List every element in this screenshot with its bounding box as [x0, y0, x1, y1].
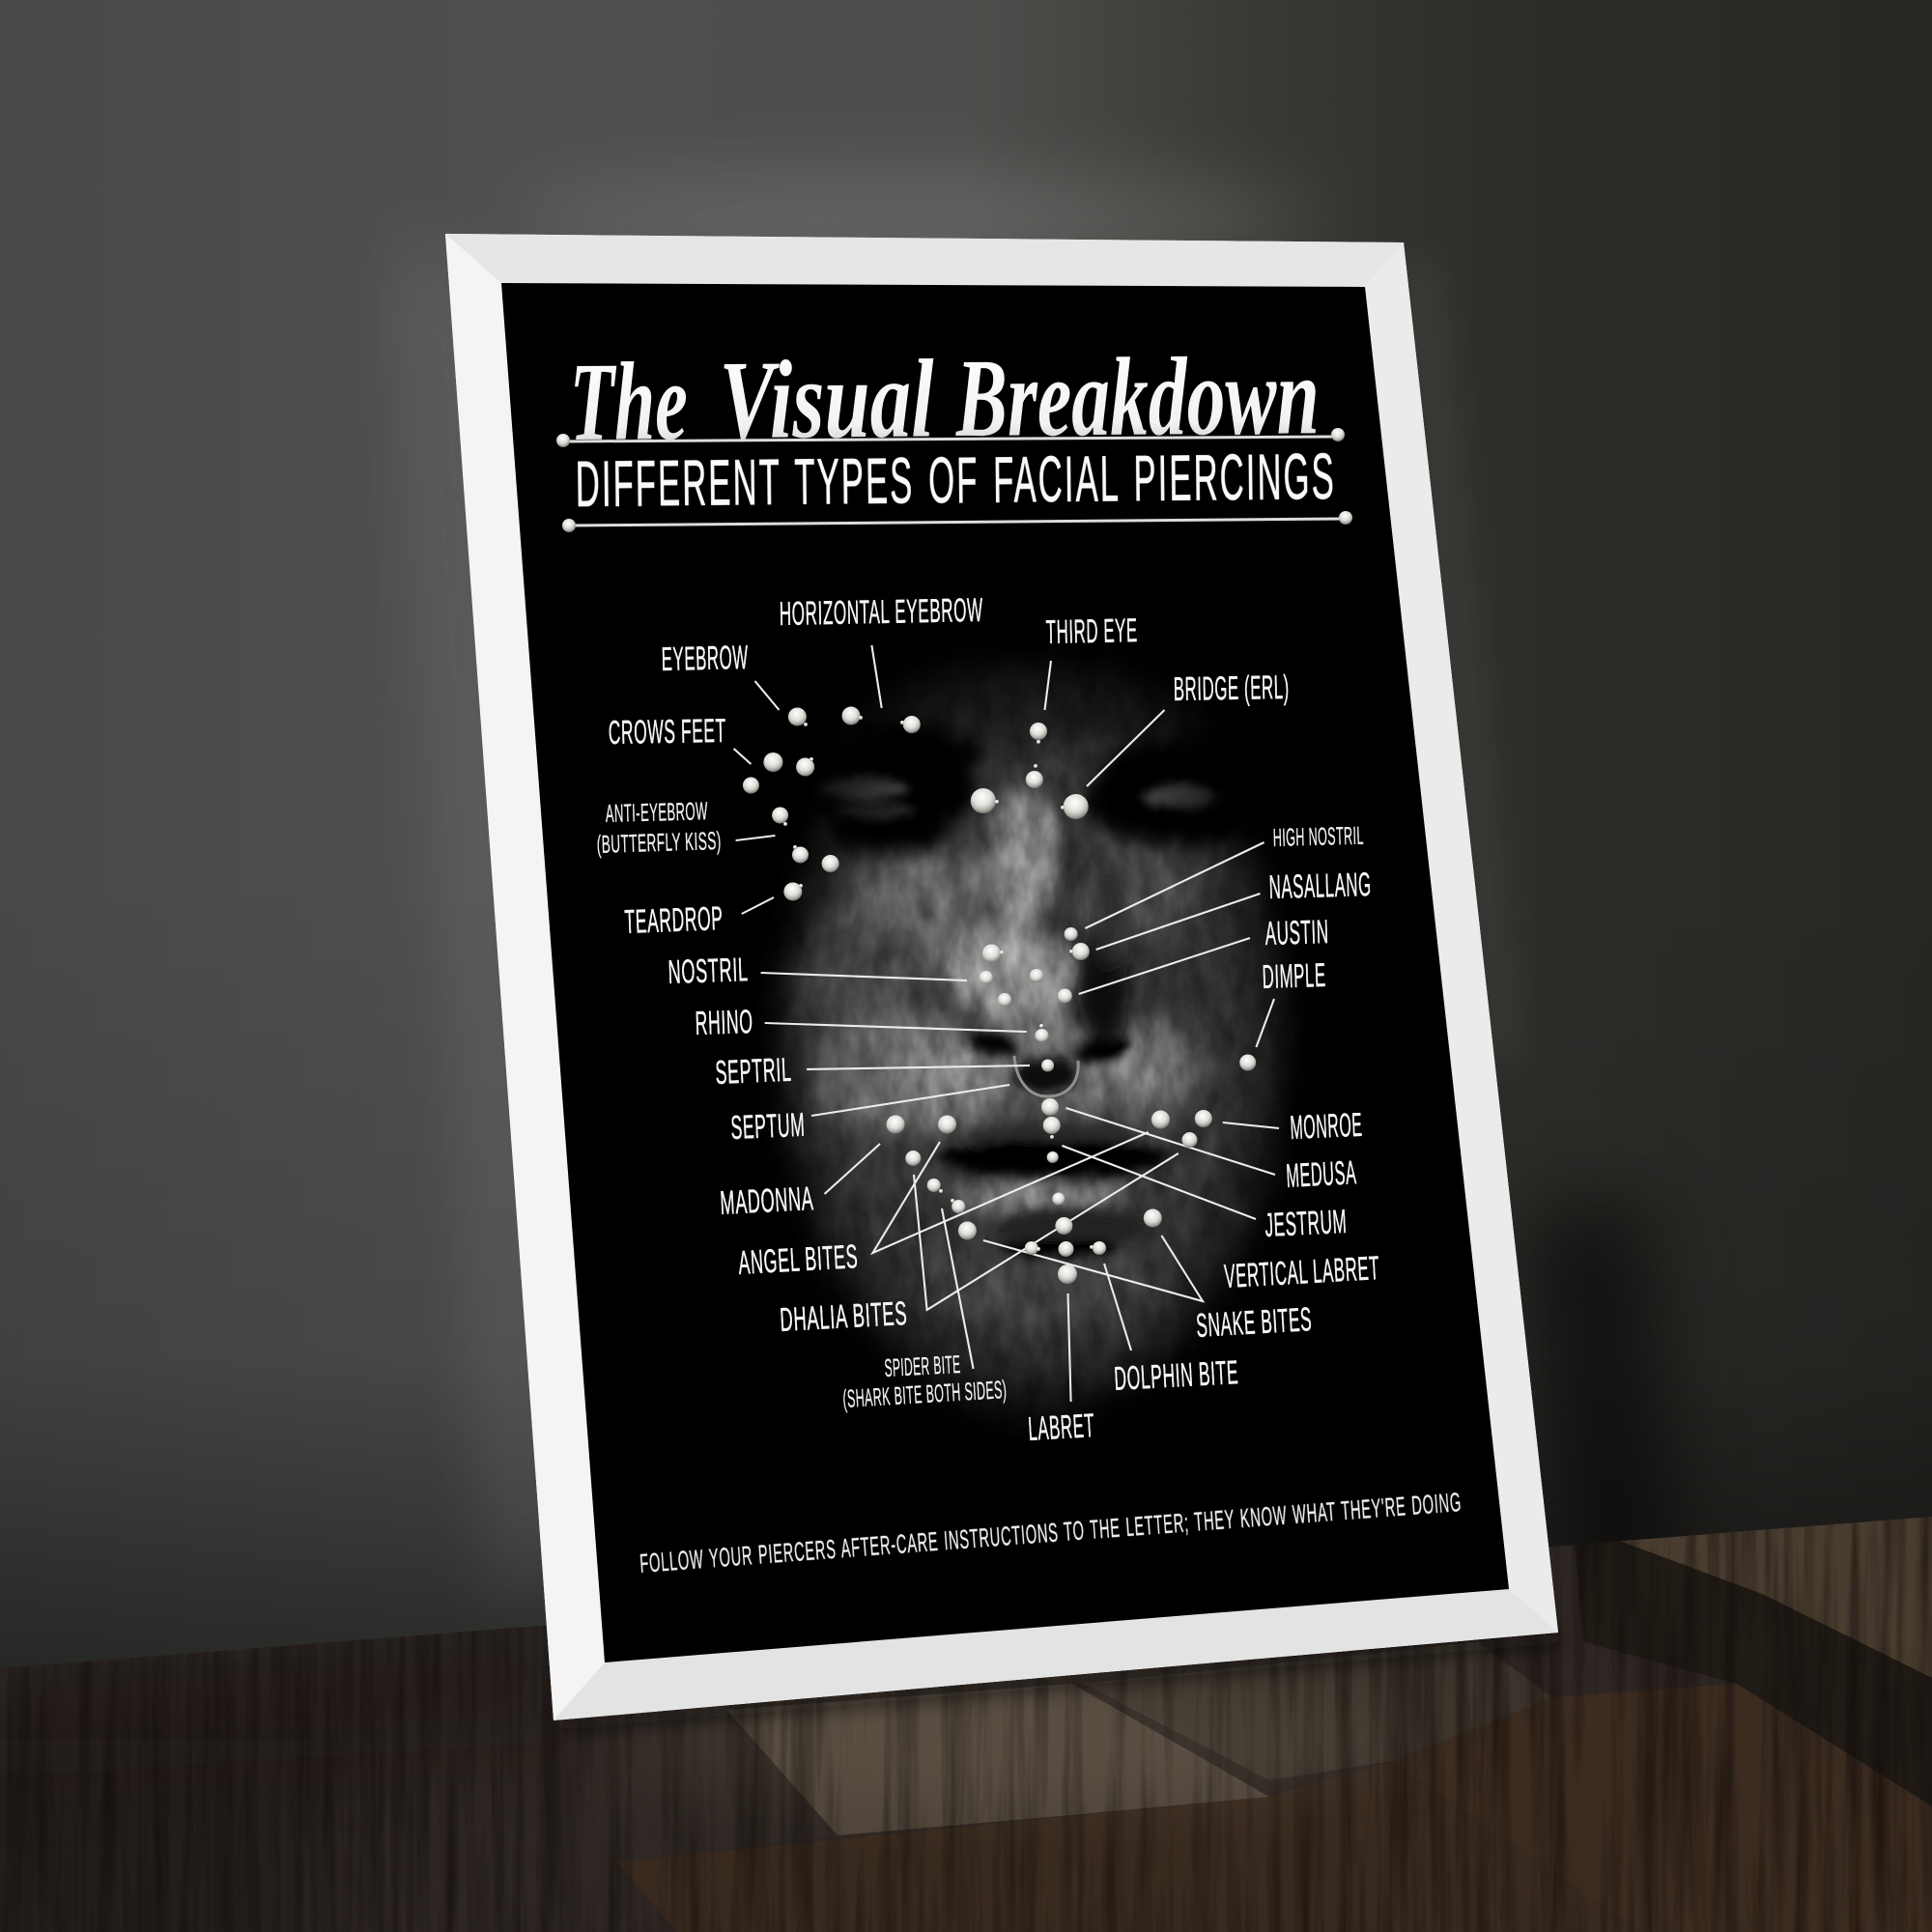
text: (SHARK BITE BOTH SIDES)	[842, 1375, 1008, 1413]
label: septum: SEPTUM	[730, 1107, 806, 1147]
label: septril: SEPTRIL	[715, 1052, 792, 1092]
title: The	[569, 340, 688, 465]
text: DIMPLE	[1262, 957, 1326, 996]
subtitle rule with end balls	[562, 511, 1352, 532]
label: anti-eyebrow: ANTI-EYEBROW	[605, 796, 708, 828]
text: NASALLANG	[1268, 867, 1372, 906]
floor plank centre light	[726, 1684, 1269, 1835]
floor plank right of frame	[1084, 1642, 1552, 1780]
frame left bevel	[445, 234, 605, 1720]
title	[556, 334, 1345, 465]
title: Breakdown	[954, 334, 1320, 461]
frame bottom bevel	[554, 1589, 1558, 1720]
wooden floor	[0, 1517, 1932, 1932]
label: dolphin bite: DOLPHIN BITE	[1113, 1354, 1239, 1398]
text: EYEBROW	[661, 639, 749, 678]
frame contact shadow	[558, 1638, 1560, 1725]
frame right bevel	[1365, 242, 1558, 1633]
title: Visual	[719, 337, 935, 463]
floor plank bottom	[616, 1761, 1642, 1932]
eye sockets and brows	[827, 721, 1241, 1045]
text: HORIZONTAL EYEBROW	[779, 592, 983, 633]
label: jestrum: JESTRUM	[1264, 1204, 1348, 1244]
text: THIRD EYE	[1045, 612, 1138, 651]
text: VERTICAL LABRET	[1223, 1250, 1380, 1295]
septum ring	[1014, 1056, 1078, 1096]
label: teardrop: TEARDROP	[624, 900, 724, 941]
floor plank centre dark	[554, 1717, 838, 1861]
leader lines	[734, 645, 1279, 1402]
text: AUSTIN	[1264, 914, 1329, 952]
text: MONROE	[1290, 1107, 1363, 1147]
text: BRIDGE (ERL)	[1173, 669, 1290, 708]
title rule with end balls	[556, 428, 1345, 447]
poster panel	[501, 283, 1509, 1662]
label: angel bites: ANGEL BITES	[737, 1238, 859, 1282]
frame top bevel	[445, 234, 1404, 287]
subtitle	[562, 440, 1352, 532]
floor dark diagonal strip	[1575, 1539, 1932, 1806]
label: butterfly kiss: (BUTTERFLY KISS)	[596, 826, 722, 859]
floor plank reddish	[1392, 1684, 1932, 1932]
label: nostril: NOSTRIL	[668, 952, 749, 991]
floor plank left	[0, 1626, 676, 1932]
text: HIGH NOSTRIL	[1272, 821, 1364, 852]
text: MEDUSA	[1285, 1154, 1357, 1195]
poster frame	[445, 234, 1558, 1720]
painted face portrait	[769, 661, 1294, 1420]
label: snake bites: SNAKE BITES	[1195, 1301, 1313, 1345]
label: rhino: RHINO	[695, 1004, 753, 1042]
text: SPIDER BITE	[884, 1350, 961, 1382]
label: dhalia bites: DHALIA BITES	[779, 1295, 908, 1339]
text: LABRET	[1027, 1407, 1095, 1448]
floor plank far right	[1614, 1514, 1932, 1678]
piercing studs	[743, 707, 1256, 1284]
label: crows feet: CROWS FEET	[608, 713, 726, 752]
eyelids, nostrils and lips	[818, 777, 1215, 1257]
label: madonna: MADONNA	[719, 1180, 814, 1222]
